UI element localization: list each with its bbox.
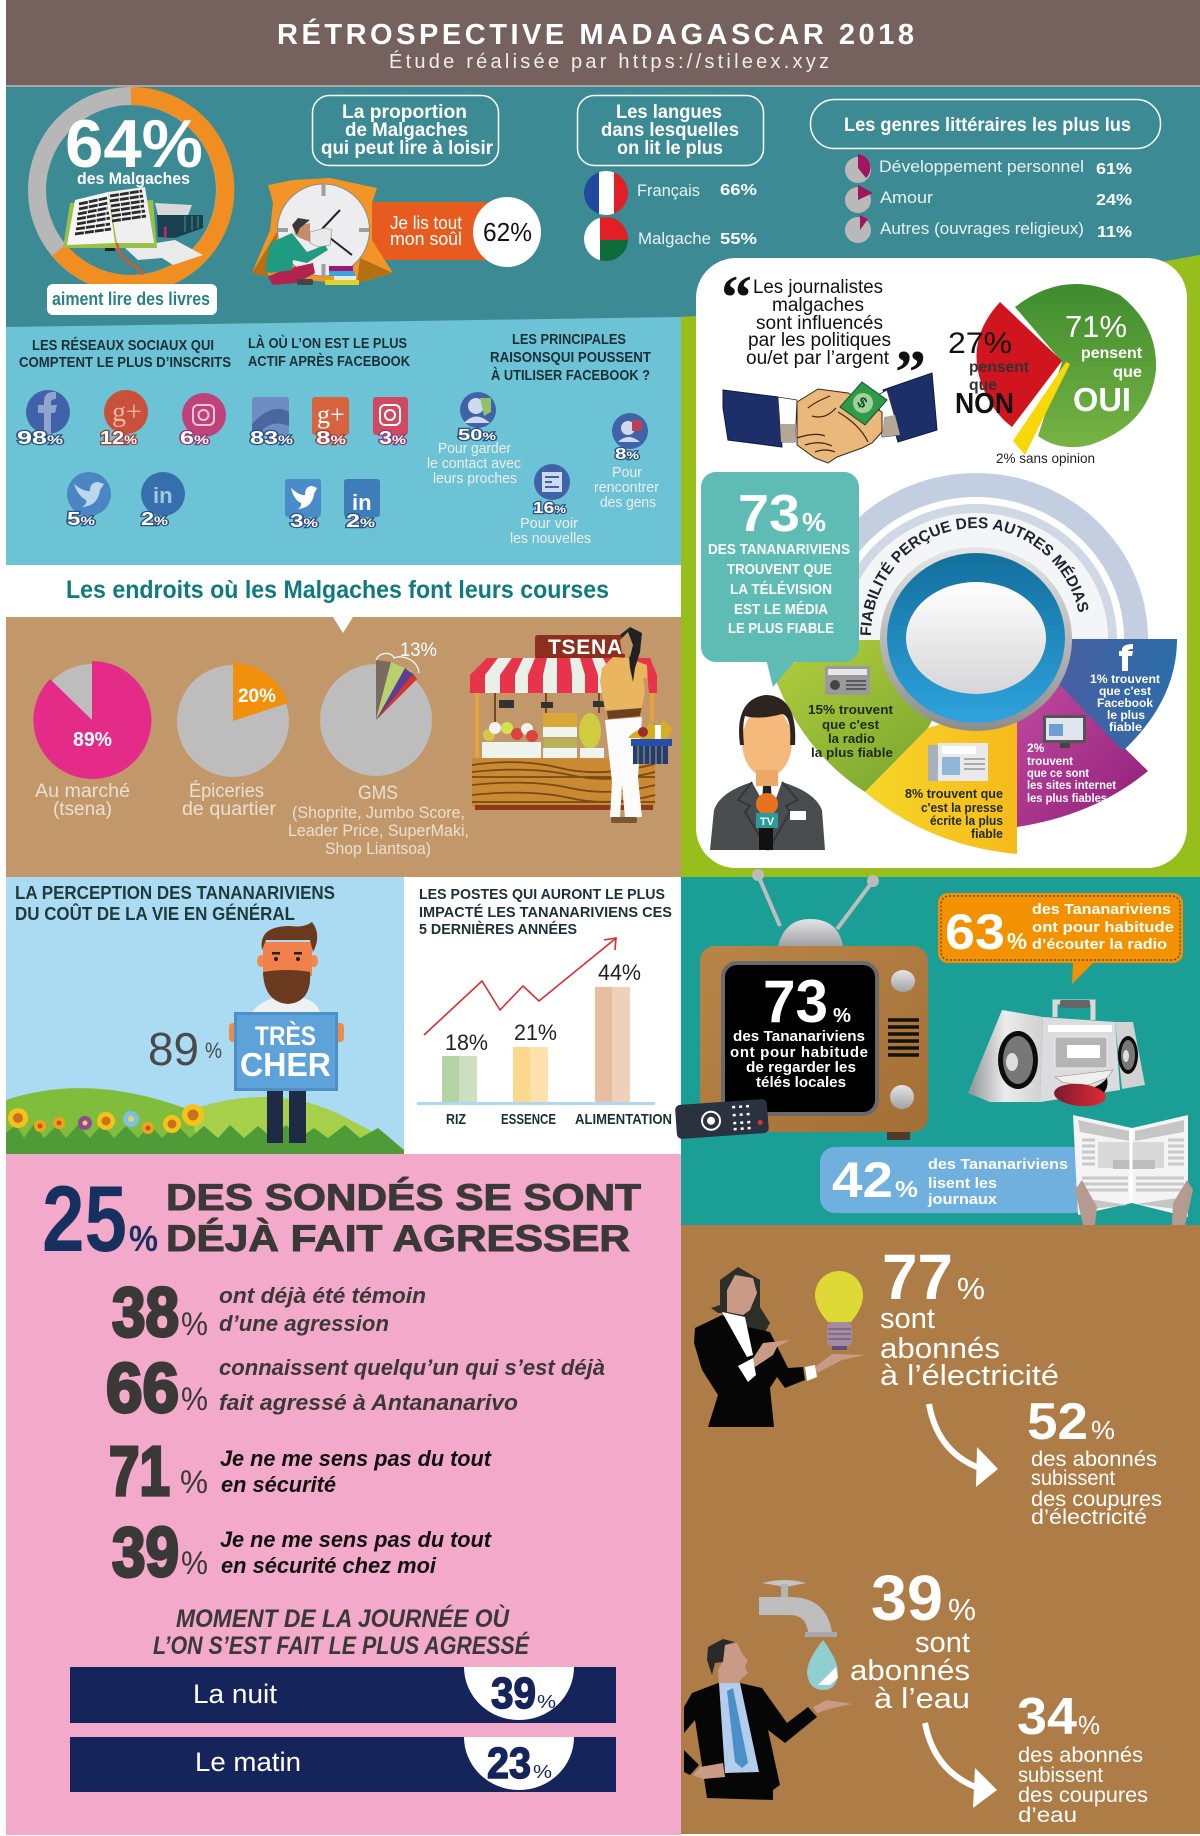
donut chart: 64%: [37, 96, 225, 284]
icon: light bulb: [815, 1271, 863, 1350]
stat: 42% journaux: 42: [832, 1152, 893, 1208]
segment: radio: [772, 639, 976, 792]
hills: [6, 1088, 404, 1154]
pie: GMS 13%: Shop Liantsoa): [325, 839, 431, 858]
stat: 52% coupures: %: [1091, 1415, 1115, 1445]
stat: 42% journaux: %: [895, 1176, 918, 1202]
list: genres: Autres (ouvrages religieux): [880, 219, 1084, 238]
heading: 25%: DES SONDÉS SE SONT: [166, 1177, 641, 1218]
icon: LinkedIn 2%: in: [153, 483, 173, 508]
stat: 38%: ont déjà été témoin: [219, 1283, 426, 1308]
icon: Instagram 6%: 6 %: [180, 428, 209, 448]
icon: television: [700, 869, 928, 1140]
stat: Malgache 55%: [638, 229, 757, 248]
list: genres: 24%: [1096, 192, 1132, 209]
segment: Facebook: fiable: [1109, 720, 1142, 734]
icon: Twitter 5%: [67, 472, 111, 529]
reason: 16%: Pour voir: [520, 515, 578, 532]
stat: 34% coupures: 34: [1017, 1688, 1077, 1746]
icon: LinkedIn square 2%: [344, 479, 380, 531]
icon: Twitter square 3%: 3 %: [290, 511, 318, 531]
heading: moment de la journée: MOMENT DE LA JOURNÉE OÙ: [176, 1604, 510, 1633]
callout: 63% radio: ont pour habitude: [1032, 919, 1174, 936]
icon: LinkedIn square 2%: 2 %: [346, 511, 375, 531]
reason: 50%: Pour garder: [438, 440, 511, 457]
segment: radio: 15% trouvent: [808, 702, 894, 717]
callout: 73% télévision: TROUVENT QUE: [727, 561, 832, 578]
figure: bearded man with sign: [229, 922, 344, 1143]
stat: 77% électricité: abonnés: [880, 1333, 1000, 1365]
segment: sites internet: [1017, 680, 1148, 827]
icon: Google+ square 8%: 8 %: [316, 428, 346, 448]
heading: langues: Les langues: [616, 102, 722, 123]
bar: le matin 23%: Le matin: [195, 1747, 301, 1777]
stat: 66%: [106, 1349, 605, 1427]
stat: 34% coupures: des abonnés: [1018, 1744, 1143, 1767]
icon: television: %: [833, 1005, 851, 1027]
callout: 63% radio: des Tananariviens: [1032, 901, 1171, 918]
quote: journalists: [721, 264, 926, 407]
heading: moment de la journée: L’ON S’EST FAIT LE PLUS AGRESSÉ: [153, 1631, 530, 1660]
reason: 8%: rencontrer: [594, 479, 659, 496]
stat: 39% eau: abonnés: [850, 1655, 970, 1687]
callout: 73% télévision: LA TÉLÉVISION: [730, 581, 832, 598]
stat: 77% électricité: %: [957, 1271, 985, 1306]
heading band: Les endroits où les Malgaches font leurs courses: [66, 576, 609, 604]
bar: la nuit 39%: %: [537, 1692, 556, 1712]
stat: 77% électricité: à l’électricité: [880, 1360, 1059, 1392]
bar: le matin 23%: 23: [487, 1739, 531, 1788]
reason: 50%: [427, 392, 521, 487]
segment: presse: c'est la presse: [921, 800, 1003, 815]
figure: businesswoman with bulb: [694, 1267, 865, 1427]
heading: proportion: La proportion: [342, 102, 467, 123]
stat: 71%: [109, 1432, 493, 1510]
segment: sites internet: que ce sont: [1027, 766, 1089, 780]
stat: 77% électricité: sont: [880, 1303, 935, 1335]
segment: Facebook: le plus: [1107, 708, 1145, 722]
label: aiment lire des livres: aiment lire des livres: [52, 289, 210, 309]
stat: Français 66%: Français: [637, 181, 700, 200]
stat: 71%: %: [180, 1464, 208, 1500]
heading: moment de la journée: [153, 1604, 530, 1660]
icon: television: 73: [763, 968, 828, 1035]
heading: proportion: qui peut lire à loisir: [321, 138, 494, 159]
panel: perception of cost of living: [6, 877, 404, 1154]
stat: 66%: connaissent quelqu’un qui s’est déjà: [219, 1355, 605, 1380]
segment: radio: que c'est: [822, 717, 880, 732]
heading: réseaux sociaux: LES RÉSEAUX SOCIAUX QUI: [32, 337, 214, 354]
bar: ALIMENTATION 44%: 44%: [598, 960, 641, 985]
segment: sites internet: trouvent: [1027, 754, 1073, 768]
heading: 25%: 25: [42, 1166, 127, 1271]
icon: French flag: [584, 170, 629, 216]
arrow: eau: [925, 1723, 997, 1808]
pie: GMS 13%: 13%: [400, 640, 437, 661]
panel: media card: [696, 258, 1187, 868]
icon: LinkedIn square 2%: in: [352, 490, 372, 515]
heading: actif après Facebook: ACTIF APRÈS FACEBOOK: [248, 353, 410, 370]
callout: 73% télévision: 73: [738, 485, 800, 543]
heading: langues: [578, 96, 764, 166]
figure: TV presenter: TV: [760, 816, 775, 828]
heading: langues: on lit le plus: [617, 138, 723, 159]
stat: 38%: 38: [112, 1273, 179, 1351]
list: genres: 61%: [1096, 161, 1132, 178]
stat: 42% journaux: [820, 1147, 1090, 1213]
icon: Instagram square 3%: [373, 397, 408, 448]
callout: 73% télévision: EST LE MÉDIA: [734, 601, 828, 618]
heading: actif après Facebook: LÀ OÙ L’ON EST LE PLUS: [248, 334, 407, 352]
stat bar: Je lis tout mon soûl 62%: mon soûl: [390, 229, 462, 249]
quote: journalists: sont influencés: [756, 313, 883, 334]
panel: utilities: [681, 1225, 1200, 1834]
quote: journalists: “: [721, 264, 752, 332]
segment: sites internet: les sites internet: [1027, 778, 1116, 792]
reason: 50%: leurs proches: [433, 470, 517, 487]
callout: 73% télévision: LE PLUS FIABLE: [728, 620, 834, 637]
heading: raisons Facebook: RAISONSQUI POUSSENT: [490, 349, 651, 366]
heading: raisons Facebook: [490, 331, 651, 384]
segment: radio: la radio: [828, 731, 875, 746]
stat: 34% coupures: des coupures: [1018, 1784, 1148, 1807]
bar: ESSENCE 21%: 21%: [514, 1020, 557, 1045]
illustration: market stall with woman: [470, 627, 672, 823]
stat: 39% eau: [850, 1562, 976, 1715]
heading band: [6, 565, 681, 633]
heading: langues: dans lesquelles: [601, 120, 739, 141]
segment: radio: la plus fiable: [811, 745, 893, 760]
bar: la nuit 39%: [70, 1667, 616, 1723]
pie: Épiceries de quartier 20%: [177, 663, 289, 820]
icon: Facebook 98%: 98 %: [17, 428, 63, 448]
icon: open book: [63, 187, 203, 275]
stat: 39%: %: [181, 1545, 208, 1581]
icon: handshake with money: $: [854, 394, 871, 413]
flowers: [8, 1104, 204, 1134]
curved title: FIABILITÉ PERÇUE DES AUTRES MÉDIAS: [860, 517, 1088, 636]
icon: Twitter 5%: 5 %: [67, 509, 95, 529]
pie: Épiceries de quartier 20%: Épiceries: [189, 781, 264, 802]
icon: television: télés locales: [756, 1074, 846, 1091]
pie chart: journalists influence: pensent: [1081, 345, 1143, 362]
stat: 39%: [112, 1513, 493, 1591]
segment: Facebook: que c'est: [1099, 684, 1151, 698]
heading: réseaux sociaux: [19, 337, 231, 371]
heading: postes: IMPACTÉ LES TANANARIVIENS CES: [419, 904, 672, 921]
callout: 73% télévision: %: [802, 507, 826, 537]
callout: 63% radio: d’écouter la radio: [1032, 936, 1167, 953]
pie chart: journalists influence: 71%: [1065, 309, 1127, 344]
pie: GMS 13%: [288, 640, 469, 858]
pie: GMS 13%: GMS: [358, 783, 398, 804]
reason: 16%: [510, 464, 591, 547]
chart: perceived reliability of other media: [776, 473, 1177, 854]
pie chart: journalists influence: que: [1113, 364, 1142, 381]
heading: postes: 5 DERNIÈRES ANNÉES: [419, 921, 577, 938]
stat: 38%: [112, 1273, 426, 1351]
icon: Instagram 6%: [180, 393, 226, 448]
segment: presse: écrite la plus: [930, 813, 1003, 828]
heading: raisons Facebook: À UTILISER FACEBOOK ?: [491, 367, 650, 384]
reason: 8%: Pour: [612, 464, 642, 481]
heading: perception: [15, 883, 335, 924]
pie: Au marché 89%: (tsena): [53, 799, 112, 820]
donut chart: 64%: 64%: [65, 106, 203, 182]
stat: 42% journaux: des Tananariviens: [928, 1156, 1068, 1173]
pie chart: journalists influence: NON: [955, 388, 1014, 420]
stat: 71%: 71: [109, 1432, 170, 1510]
stat: 52% coupures: des abonnés: [1031, 1448, 1157, 1471]
bar: ALIMENTATION 44%: [575, 960, 672, 1128]
stat: 66%: 66: [106, 1349, 179, 1427]
callout: 73% télévision: [701, 472, 859, 687]
stat: 39% eau: sont: [915, 1627, 970, 1659]
pie: GMS 13%: (Shoprite, Jumbo Score,: [292, 803, 465, 822]
heading: 25%: DÉJÀ FAIT AGRESSER: [166, 1218, 630, 1259]
pie: Au marché 89%: [33, 661, 151, 820]
awning: [470, 658, 657, 693]
stat: 38%: d’une agression: [219, 1311, 389, 1336]
stat: 39% eau: %: [948, 1592, 976, 1627]
reason: 8%: [594, 413, 659, 511]
callout: 73% télévision: DES TANANARIVIENS: [708, 541, 850, 558]
pie: Au marché 89%: Au marché: [35, 781, 130, 802]
heading: proportion: de Malgaches: [345, 120, 468, 141]
panel: cost bar chart: [404, 877, 681, 1154]
panel: reading habits: [6, 87, 1200, 327]
icon: newspaper with hands: [1073, 1115, 1193, 1225]
icon: handshake with money: [723, 373, 937, 463]
quote: journalists: ou/et par l’argent: [746, 348, 890, 369]
heading: perception: DU COÛT DE LA VIE EN GÉNÉRAL: [15, 903, 295, 924]
sign: CHER: [240, 1046, 331, 1083]
icon: Google+ square 8%: [312, 397, 349, 448]
reason: 50%: le contact avec: [427, 455, 521, 472]
heading: genres littéraires: Les genres littéraires les plus lus: [844, 115, 1131, 136]
figure: TV presenter: [710, 695, 825, 850]
stat: 34% coupures: d’eau: [1018, 1804, 1077, 1827]
bar: RIZ 18%: [442, 1030, 488, 1128]
bar: le matin 23%: %: [533, 1762, 552, 1782]
callout: 63% radio: [938, 893, 1183, 984]
quote: journalists: Les journalistes: [753, 277, 883, 298]
icon: LinkedIn 2%: [141, 472, 185, 529]
icon: Google+ 12%: g+: [112, 397, 142, 428]
reason: 8%: des gens: [600, 494, 656, 511]
sign: [236, 1014, 336, 1090]
pie chart: journalists influence: [948, 284, 1156, 466]
bar: la nuit 39%: La nuit: [193, 1679, 278, 1709]
segment: presse: fiable: [971, 826, 1003, 841]
heading: perception: LA PERCEPTION DES TANANARIVIENS: [15, 883, 335, 903]
stat: 34% coupures: subissent: [1018, 1764, 1103, 1787]
woman: [600, 627, 672, 823]
stat bar: Je lis tout mon soûl 62%: [372, 197, 541, 267]
stat: Malgache 55%: Malgache: [638, 229, 711, 248]
figure: businessman: [684, 1639, 852, 1800]
pie: Au marché 89%: 89%: [73, 729, 112, 751]
arrow: électricité: [929, 1404, 998, 1487]
list: genres: [845, 154, 1132, 243]
segment: presse: 8% trouvent que: [905, 786, 1003, 801]
stat: 39% eau: 39: [871, 1562, 943, 1634]
stat: 66%: %: [181, 1381, 208, 1417]
stat: 89%: 89: [148, 1023, 199, 1075]
segment: Facebook: Facebook: [1097, 696, 1153, 710]
heading: proportion: [312, 96, 498, 166]
panel: social networks background: [6, 300, 681, 565]
heading: postes: [419, 886, 672, 938]
segment: Facebook: [1055, 639, 1177, 751]
panel: media habits: [675, 869, 1200, 1225]
heading: 25%: %: [129, 1218, 158, 1259]
list: genres: Amour: [880, 188, 933, 207]
panel: aggressions: [6, 1154, 681, 1835]
title: RÉTROSPECTIVE MADAGASCAR 2018: [277, 17, 914, 51]
stat: 71%: en sécurité: [221, 1472, 336, 1497]
panel: shopping places: [6, 565, 681, 877]
bar: ESSENCE 21%: [501, 1020, 557, 1128]
bar: ALIMENTATION 44%: ALIMENTATION: [575, 1111, 672, 1128]
list: genres: 11%: [1097, 224, 1132, 241]
pie: Épiceries de quartier 20%: de quartier: [182, 799, 277, 820]
stat: 38%: %: [181, 1306, 208, 1342]
pie chart: journalists influence: 27%: [948, 327, 1012, 360]
icon: Google+ square 8%: g+: [317, 400, 345, 429]
segment: presse: [865, 700, 1017, 854]
sign: TRÈS: [255, 1020, 316, 1051]
icon: Facebook 98%: [17, 390, 70, 448]
donut chart: 64%: des Malgaches: [77, 169, 190, 188]
reason: 16%: les nouvelles: [510, 530, 591, 547]
label: aiment lire des livres: [47, 284, 217, 315]
segment: sites internet: les plus fiables: [1027, 791, 1107, 805]
stat: Français 66%: [637, 181, 757, 200]
icon: Madagascar flag: [584, 216, 630, 262]
stat: 71%: Je ne me sens pas du tout: [220, 1446, 493, 1471]
icon: boombox: [968, 1000, 1145, 1108]
stat: 34% coupures: %: [1078, 1710, 1100, 1740]
icon: Instagram square 3%: 3 %: [379, 428, 406, 448]
icon: television: des Tananariviens: [733, 1028, 865, 1045]
quote: journalists: par les politiques: [748, 330, 891, 351]
stat: 52% coupures: 52: [1027, 1393, 1088, 1451]
stat: 42% journaux: lisent les: [928, 1175, 997, 1192]
heading: actif après Facebook: [248, 334, 410, 370]
icon: television: ont pour habitude: [730, 1044, 868, 1061]
heading: raisons Facebook: LES PRINCIPALES: [512, 331, 626, 348]
panel: social networks: [17, 331, 659, 547]
bar: le matin 23%: [70, 1737, 616, 1792]
illustration: market stall with woman: TSENA: [548, 636, 622, 659]
pie: GMS 13%: Leader Price, SuperMaki,: [288, 821, 469, 840]
arrow: rising trend line: [424, 938, 616, 1035]
callout: 63% radio: %: [1007, 928, 1027, 954]
panel: green media background: [681, 255, 1200, 877]
bar: ESSENCE 21%: ESSENCE: [501, 1111, 556, 1128]
pie chart: journalists influence: 2% sans opinion: [996, 450, 1095, 466]
heading: postes: LES POSTES QUI AURONT LE PLUS: [419, 886, 665, 903]
reason: 50%: 50 %: [458, 427, 496, 444]
stat bar: Je lis tout mon soûl 62%: 62%: [483, 217, 532, 247]
stat: 39%: 39: [112, 1513, 179, 1591]
icon: Facebook square 83%: 83 %: [250, 428, 293, 448]
heading: genres littéraires: [810, 100, 1160, 148]
icon: LinkedIn 2%: 2 %: [141, 509, 168, 529]
quote: journalists: malgaches: [772, 295, 864, 316]
bar: RIZ 18%: RIZ: [446, 1111, 466, 1128]
stat: 77% électricité: [880, 1241, 1059, 1392]
icon: Twitter square 3%: [285, 479, 321, 531]
callout: 63% radio: 63: [945, 904, 1005, 960]
stat: 52% coupures: subissent: [1031, 1467, 1115, 1490]
pie chart: journalists influence: pensent: [969, 359, 1030, 376]
stat: 34% coupures: [1017, 1688, 1148, 1827]
stat: 89%: [148, 1023, 222, 1075]
icon: Facebook square 83%: [250, 397, 293, 448]
stat: 52% coupures: des coupures: [1031, 1488, 1162, 1511]
icon: Google+ 12%: 12 %: [100, 428, 137, 448]
list: genres: Développement personnel: [879, 157, 1084, 176]
heading: réseaux sociaux: COMPTENT LE PLUS D’INSCRITS: [19, 354, 231, 371]
icon: remote control: [675, 1099, 769, 1139]
stat: Français 66%: 66%: [720, 182, 757, 199]
stat: 89%: %: [205, 1038, 222, 1063]
stat: 52% coupures: [1027, 1393, 1162, 1529]
stat: 39% eau: à l’eau: [874, 1683, 970, 1715]
reason: 16%: 16 %: [533, 500, 566, 517]
stat bar: Je lis tout mon soûl 62%: Je lis tout: [390, 213, 462, 233]
stat: 42% journaux: journaux: [927, 1191, 998, 1208]
stat: 77% électricité: 77: [882, 1241, 953, 1313]
bar: la nuit 39%: 39: [491, 1669, 536, 1718]
panel: header: [6, 0, 1200, 87]
stat: 52% coupures: d’électricité: [1031, 1506, 1147, 1529]
stat: 66%: fait agressé à Antananarivo: [219, 1390, 518, 1415]
pie chart: journalists influence: que: [969, 377, 997, 394]
stat: 39%: Je ne me sens pas du tout: [220, 1527, 493, 1552]
segment: Facebook: 1% trouvent: [1090, 672, 1160, 686]
bar: RIZ 18%: 18%: [445, 1030, 488, 1055]
icon: faucet and drop: [759, 1580, 838, 1690]
stat: 39%: en sécurité chez moi: [221, 1553, 437, 1578]
heading: 25%: [42, 1166, 641, 1271]
stat: Malgache 55%: 55%: [720, 231, 757, 248]
icon: Google+ 12%: [100, 390, 148, 448]
icon: clock with reading man: [252, 178, 393, 285]
pie: Épiceries de quartier 20%: 20%: [238, 686, 276, 707]
pie chart: journalists influence: OUI: [1073, 381, 1131, 418]
reason: 8%: 8%: [615, 446, 639, 463]
icon: television: de regarder les: [746, 1059, 856, 1076]
subtitle: Étude réalisée par https://stileex.xyz: [389, 50, 829, 73]
segment: sites internet: 2%: [1027, 741, 1045, 755]
quote: journalists: ”: [895, 339, 926, 407]
